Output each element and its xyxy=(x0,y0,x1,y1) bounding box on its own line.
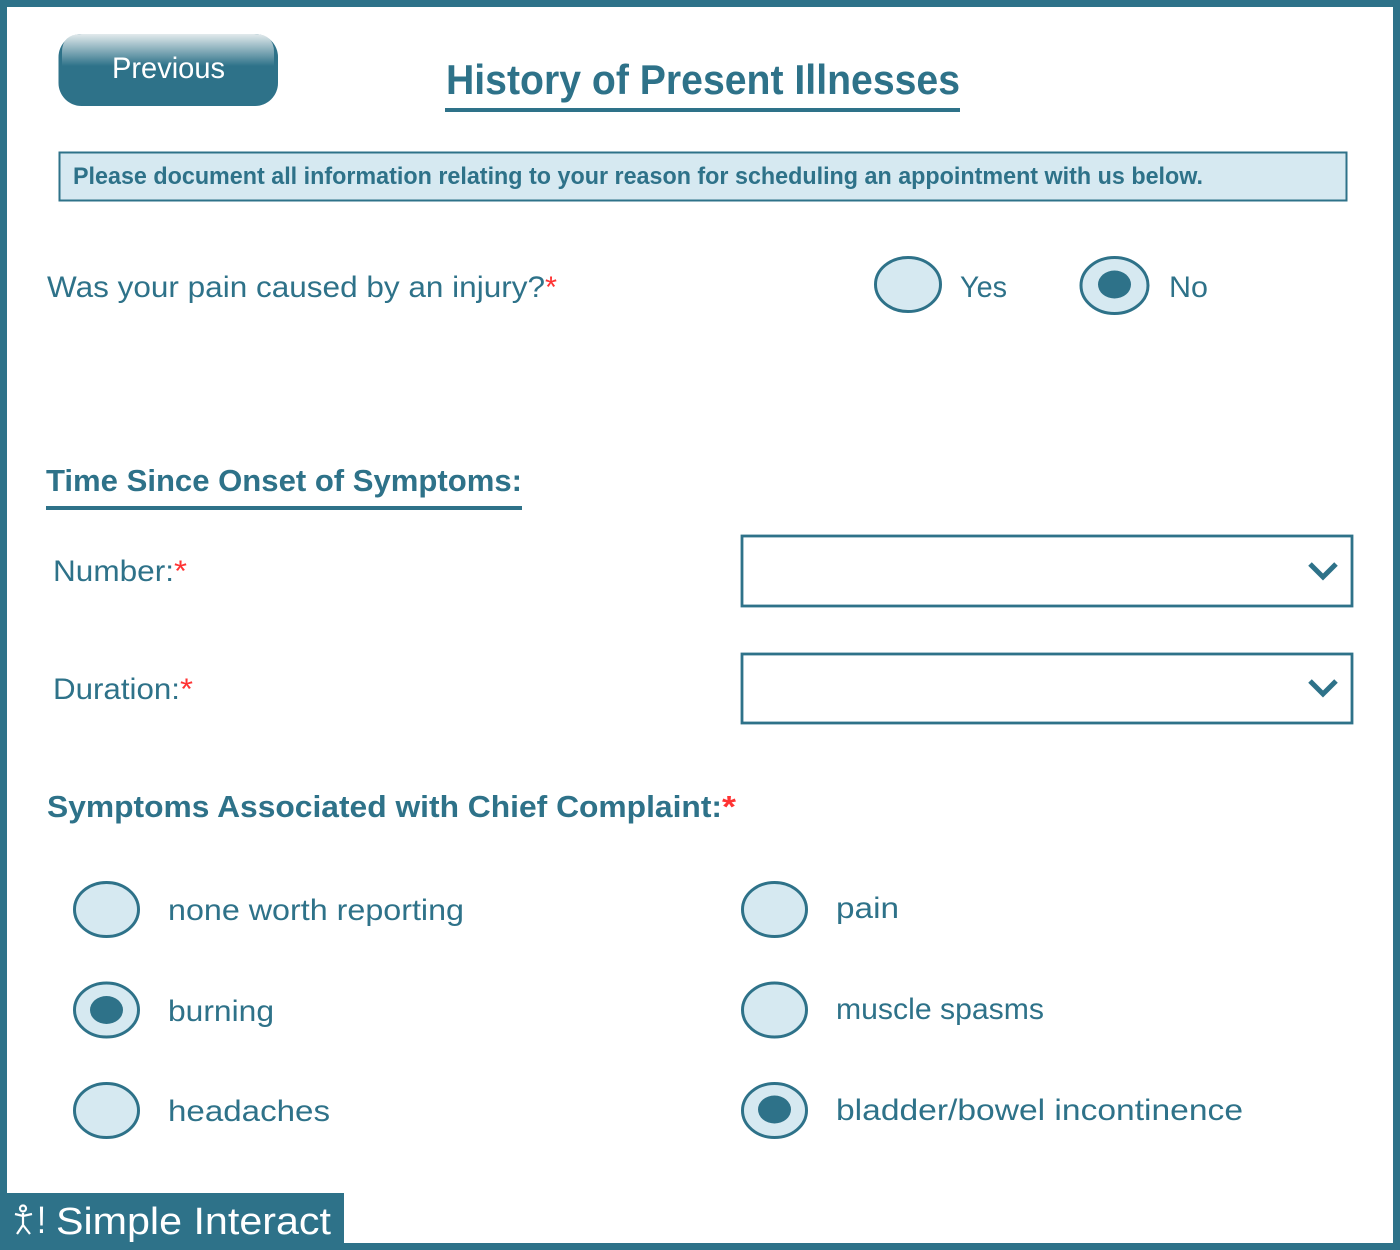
radio: no selected xyxy=(1081,258,1208,314)
previous button: Previous xyxy=(112,52,225,85)
dropdown: number xyxy=(742,536,1352,606)
option: bladder/bowel incontinence selected: bladder/bowel incontinence xyxy=(836,1094,1243,1127)
footer brand: Simple Interact xyxy=(56,1201,331,1243)
dropdown: duration xyxy=(742,654,1352,723)
radio: yes xyxy=(876,258,1007,312)
question: injury: * xyxy=(545,271,557,304)
previous button xyxy=(58,34,278,106)
label: duration: Duration: xyxy=(53,673,180,706)
section heading: symptoms: Symptoms Associated with Chief Complaint: xyxy=(47,789,722,824)
radio: no selected: No xyxy=(1169,271,1208,304)
section heading: symptoms: * xyxy=(722,789,737,824)
option: pain: pain xyxy=(836,892,899,925)
option: muscle spasms: muscle spasms xyxy=(836,993,1044,1026)
label: number: * xyxy=(174,555,187,588)
option: none worth reporting xyxy=(74,882,464,936)
option: burning selected: burning xyxy=(168,995,274,1028)
option: headaches: headaches xyxy=(168,1095,330,1128)
radio: yes: Yes xyxy=(960,271,1007,304)
option: headaches xyxy=(74,1084,330,1138)
option: muscle spasms xyxy=(742,983,1044,1037)
footer brand: ! xyxy=(37,1200,46,1242)
label: duration: * xyxy=(180,673,193,706)
title: History of Present Illnesses xyxy=(446,56,960,103)
option: pain xyxy=(742,882,899,936)
option: burning selected xyxy=(74,983,274,1037)
instruction banner xyxy=(60,152,1346,200)
question: injury: Was your pain caused by an injury? xyxy=(47,271,545,304)
section heading: time since onset: Time Since Onset of Symptoms: xyxy=(46,463,522,498)
option: bladder/bowel incontinence selected xyxy=(742,1084,1243,1138)
instruction banner: Please document all information relating to your reason for scheduling an appointment with us below. xyxy=(73,163,1203,190)
footer brand xyxy=(0,1193,344,1250)
option: none worth reporting: none worth reporting xyxy=(168,894,464,927)
label: number: Number: xyxy=(53,555,174,588)
